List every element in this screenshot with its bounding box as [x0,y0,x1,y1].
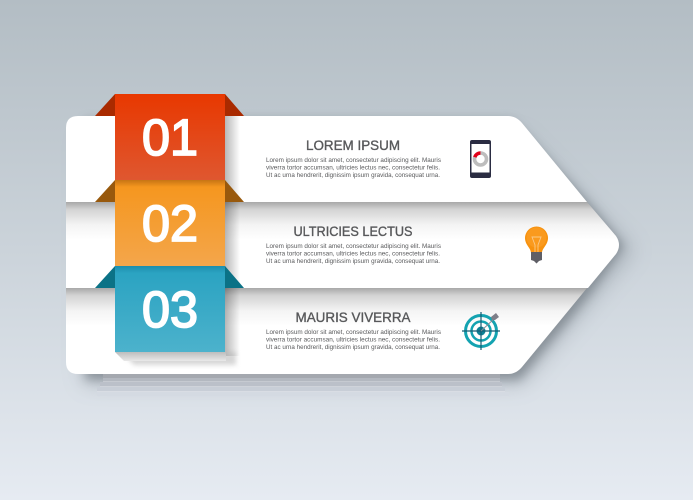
icon: light bulb [525,226,548,264]
tab bottom shadow [122,352,236,365]
text block 1: Lorem ipsum dolor sit amet, consectetur adipiscing elit. Mauris [266,157,442,164]
text block 3: viverra tortor accumsan, ultricies lectus nec, consectetur felis. [266,336,440,344]
text block 1: LOREM IPSUM [306,138,400,153]
text block 3: MAURIS VIVERRA [296,310,410,325]
tab side shadow [225,116,240,356]
band 1 [66,116,587,202]
ribbon folds: teal [95,266,244,288]
band 2 [66,202,619,288]
text block 3: Lorem ipsum dolor sit amet, consectetur adipiscing elit. Mauris [266,329,442,336]
tab 02: 02 [142,195,198,252]
text block 1: viverra tortor accumsan, ultricies lectus nec, consectetur felis. [266,164,440,172]
panel: arrow card [66,116,619,374]
text block 2: ULTRICIES LECTUS [294,224,412,239]
stacked paper stripes [97,374,509,396]
tab 02 [115,180,225,266]
ribbon folds: orange [95,180,244,202]
text block 3 [266,310,442,351]
text block 2: Ut ac urna hendrerit, dignissim ipsum gravida, consequat urna. [266,258,440,265]
icon: smartphone [470,140,491,178]
text block 2: viverra tortor accumsan, ultricies lectus nec, consectetur felis. [266,250,440,258]
panel shadow [84,135,634,384]
text block 3: Ut ac urna hendrerit, dignissim ipsum gravida, consequat urna. [266,344,440,351]
text block 1: Ut ac urna hendrerit, dignissim ipsum gravida, consequat urna. [266,172,440,179]
panel close shadow [85,120,624,380]
tab 01 [115,94,225,180]
ribbon folds: red [95,94,244,116]
text block 2 [266,224,442,265]
tab 01: 01 [142,109,198,166]
tab 03: 03 [142,281,198,338]
band 3 [66,288,587,374]
text block 1 [266,138,442,179]
icon: target [462,312,500,350]
tab 03 [115,266,225,352]
text block 2: Lorem ipsum dolor sit amet, consectetur adipiscing elit. Mauris [266,243,442,250]
